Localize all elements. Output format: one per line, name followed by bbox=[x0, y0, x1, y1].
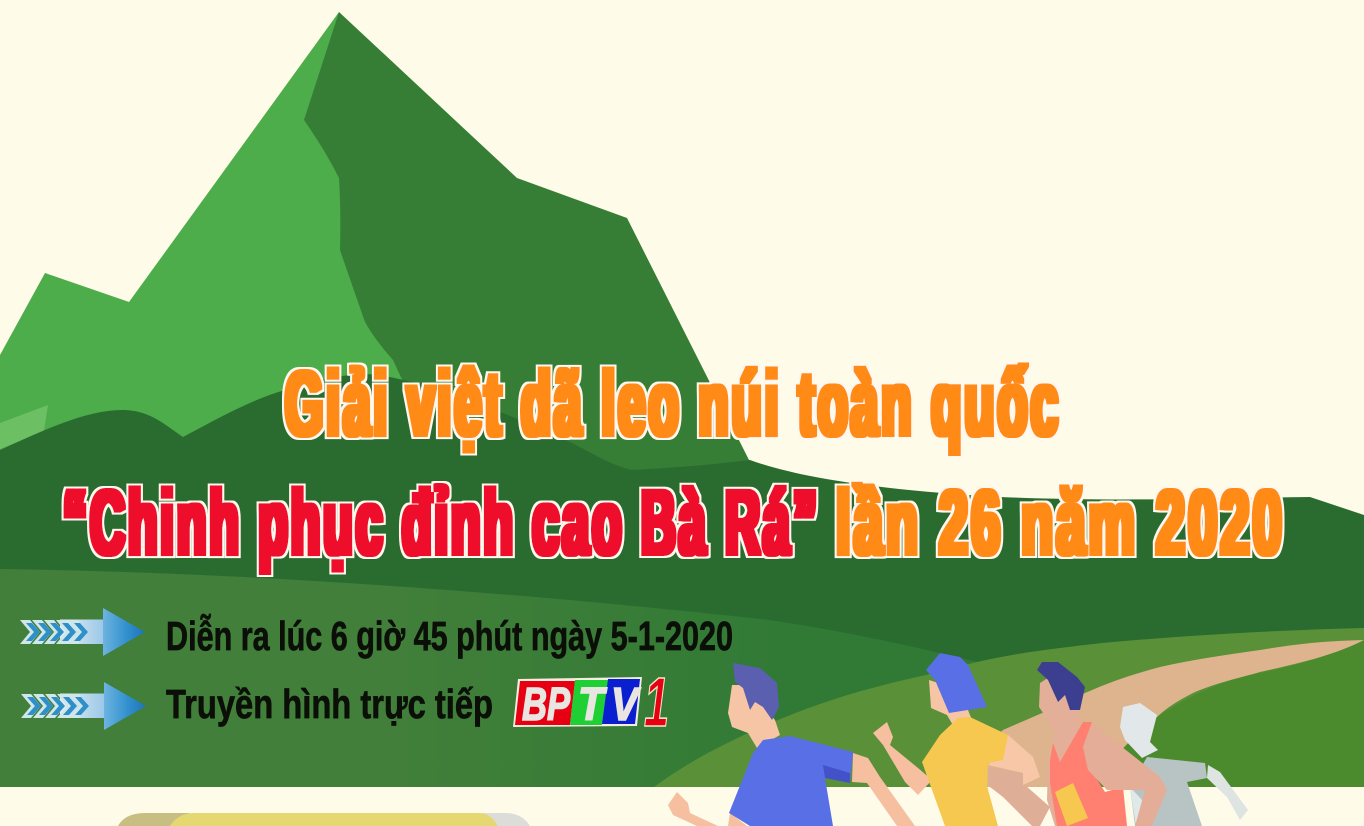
BPTV1 logo: T bbox=[578, 678, 608, 730]
mountain: shaded face bbox=[304, 12, 750, 490]
BPTV1 logo: BP bbox=[522, 678, 570, 730]
arrow icon 1 bbox=[20, 608, 145, 656]
mountain: lit face bbox=[0, 12, 420, 470]
runner 3 orange tank bbox=[988, 662, 1167, 826]
mountain bbox=[0, 12, 750, 490]
BPTV1 logo: V bbox=[611, 678, 641, 730]
runner 2 yellow shirt bbox=[873, 653, 1040, 826]
live broadcast text: Truyền hình trực tiếp bbox=[166, 681, 493, 727]
runner 1 blue shirt bbox=[668, 663, 915, 826]
dirt road bbox=[970, 640, 1364, 787]
runner 4 grey bbox=[1120, 703, 1248, 826]
arrow icon 2 bbox=[21, 682, 146, 730]
bottom card top edge bbox=[118, 813, 530, 826]
BPTV1 logo: 1 bbox=[644, 663, 669, 741]
mid meadow bbox=[0, 569, 977, 787]
near meadow bbox=[654, 628, 1364, 787]
event time text: Diễn ra lúc 6 giờ 45 phút ngày 5-1-2020 bbox=[166, 613, 733, 659]
BPTV1 logo bbox=[513, 663, 669, 741]
mountain: light shard bbox=[0, 405, 48, 449]
right meadow bbox=[1080, 640, 1364, 787]
front hills bbox=[0, 374, 1364, 700]
